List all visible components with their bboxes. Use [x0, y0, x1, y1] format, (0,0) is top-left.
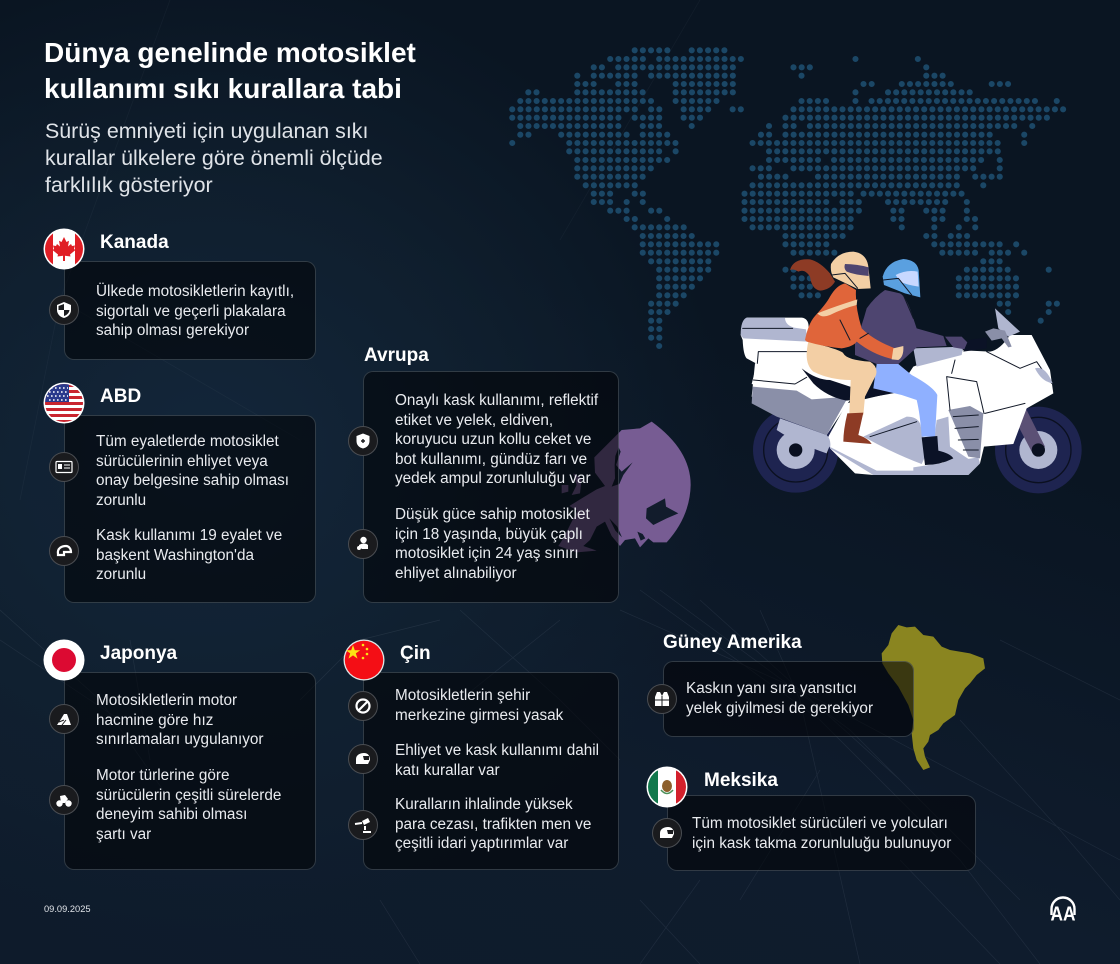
text: Çin licence rule: katı kurallar var [395, 762, 500, 779]
text: Çin city centre rule [395, 687, 564, 724]
text: Çin penalty rule: çeşitli idari yaptırımlar var [395, 835, 568, 852]
icon: shield [49, 295, 79, 325]
icon: licence card [49, 452, 79, 482]
text: Avrupa equipment rule: yedek ampul zorunluluğu var [395, 470, 591, 487]
text: Japonya experience rule: şartı var [96, 826, 151, 843]
text: Meksika rule: için kask takma zorunluluğu bulunuyor [692, 835, 951, 852]
panel: Japonya [44, 640, 316, 870]
text: ABD helmet rule [96, 527, 282, 583]
date: 09.09.2025 [44, 904, 91, 914]
text: Kanada rule: sigortalı ve geçerli plakalara [96, 303, 286, 320]
text: Japonya speed rule: sınırlamaları uygulanıyor [96, 731, 264, 748]
text: ABD helmet rule: zorunlu [96, 566, 146, 583]
logo: AA [1050, 896, 1076, 926]
text: ABD helmet rule: başkent Washington'da [96, 547, 254, 564]
text: Japonya experience rule [96, 767, 281, 843]
text: Çin penalty rule: para cezası, trafikten men ve [395, 816, 591, 833]
engine grill [947, 352, 1052, 458]
text: ABD licence rule: zorunlu [96, 492, 146, 509]
icon: helmet [348, 744, 378, 774]
flag: Japan [44, 640, 84, 680]
subtitle: Sürüş emniyeti için uygulanan sıkı [45, 119, 368, 143]
text: Avrupa equipment rule: koruyucu uzun kollu ceket ve [395, 431, 591, 448]
text: Avrupa age rule [395, 506, 590, 582]
icon: motorcycle [49, 785, 79, 815]
text: Çin city centre rule: merkezine girmesi yasak [395, 707, 563, 724]
text: Çin penalty rule [395, 796, 591, 852]
text: ABD licence rule: Tüm eyaletlerde motosiklet [96, 433, 279, 450]
text: Japonya speed rule [96, 692, 264, 748]
body base fill [752, 340, 853, 435]
icon: prohibited [348, 691, 378, 721]
icon: shield with plus [348, 426, 378, 456]
text: Avrupa equipment rule: Onaylı kask kullanımı, reflektif [395, 392, 598, 409]
icon: speed terrain [49, 704, 79, 734]
icon: gavel [348, 810, 378, 840]
flag: Canada [44, 228, 84, 270]
lower fairing [777, 417, 980, 475]
icon: helmet [652, 818, 682, 848]
flag: China [344, 640, 384, 680]
logo: AA: AA [1050, 904, 1076, 926]
text: Avrupa equipment rule: bot kullanımı, gündüz farı ve [395, 451, 587, 468]
text: Japonya speed rule: Motosikletlerin motor [96, 692, 237, 709]
text: Japonya experience rule: deneyim sahibi olması [96, 806, 247, 823]
heading: Avrupa: Avrupa [364, 345, 429, 366]
text: Japonya experience rule: Motor türlerine göre [96, 767, 229, 784]
icon: reflective vest [647, 684, 677, 714]
text: Avrupa age rule: için 18 yaşında, büyük çaplı [395, 526, 583, 543]
text: Kanada rule: Ülkede motosikletlerin kayıtlı, [96, 283, 294, 300]
female rider [790, 252, 903, 444]
text: Çin licence rule [395, 742, 599, 779]
panel: Kanada [44, 228, 316, 360]
text: Güney Amerika rule [686, 680, 873, 717]
text: Çin city centre rule: Motosikletlerin şehir [395, 687, 530, 704]
text: Avrupa equipment rule: etiket ve yelek, eldiven, [395, 412, 553, 429]
heading: Çin: Çin [400, 643, 431, 664]
fairing highlight [1035, 368, 1053, 383]
heading: Güney Amerika: Güney Amerika [663, 632, 802, 653]
text: Çin penalty rule: Kuralların ihlalinde yüksek [395, 796, 573, 813]
subtitle: kurallar ülkelere göre önemli ölçüde [45, 146, 383, 170]
pannier [752, 370, 848, 435]
text: Güney Amerika rule: Kaskın yanı sıra yansıtıcı [686, 680, 857, 697]
heading: Japonya: Japonya [100, 643, 177, 664]
text: Japonya experience rule: sürücülerin çeşitli sürelerde [96, 787, 281, 804]
seat [802, 368, 897, 401]
front wheel [995, 407, 1082, 493]
text: Japonya speed rule: hacmine göre hız [96, 712, 213, 729]
title: Dünya genelinde motosiklet [44, 37, 416, 68]
text: ABD licence rule: sürücülerinin ehliyet veya [96, 453, 268, 470]
icon: person with licence [348, 529, 378, 559]
flag: Mexico [646, 766, 688, 808]
windshield [913, 308, 1020, 367]
flag: USA [44, 382, 84, 424]
rear wheel [753, 407, 838, 493]
top case [741, 318, 810, 372]
text: Kanada rule [96, 282, 294, 339]
panel: Güney Amerika [647, 632, 914, 737]
heading: Kanada: Kanada [100, 232, 169, 253]
text: Meksika rule [692, 815, 952, 852]
heading: Meksika: Meksika [704, 770, 778, 791]
text: Meksika rule: Tüm motosiklet sürücüleri ve yolcuları [692, 815, 948, 832]
title: kullanımı sıkı kurallara tabi [44, 73, 402, 104]
panel: ABD [44, 382, 316, 603]
text: ABD licence rule: onay belgesine sahip olması [96, 472, 289, 489]
icon: helmet [49, 536, 79, 566]
subtitle [45, 119, 383, 197]
text: ABD licence rule [96, 433, 289, 509]
panel: Meksika [646, 766, 976, 871]
text: Çin licence rule: Ehliyet ve kask kullanımı dahil [395, 742, 599, 759]
title [44, 37, 416, 104]
text: Avrupa age rule: ehliyet alınabiliyor [395, 565, 517, 582]
motorcycle body [828, 335, 1053, 475]
text: Avrupa age rule: Düşük güce sahip motosiklet [395, 506, 590, 523]
text: ABD helmet rule: Kask kullanımı 19 eyalet ve [96, 527, 282, 544]
text: Güney Amerika rule: yelek giyilmesi de gerekiyor [686, 700, 873, 717]
text: Avrupa age rule: motosiklet için 24 yaş sınırı [395, 545, 579, 562]
mirror [985, 328, 1012, 347]
heading: ABD: ABD [100, 386, 141, 407]
panel: Çin [344, 640, 619, 870]
subtitle: farklılık gösteriyor [45, 173, 213, 197]
panel: Avrupa [52, 345, 619, 603]
text: Avrupa equipment rule [395, 392, 598, 487]
male rider [855, 259, 987, 465]
text: Kanada rule: sahip olması gerekiyor [96, 322, 249, 339]
